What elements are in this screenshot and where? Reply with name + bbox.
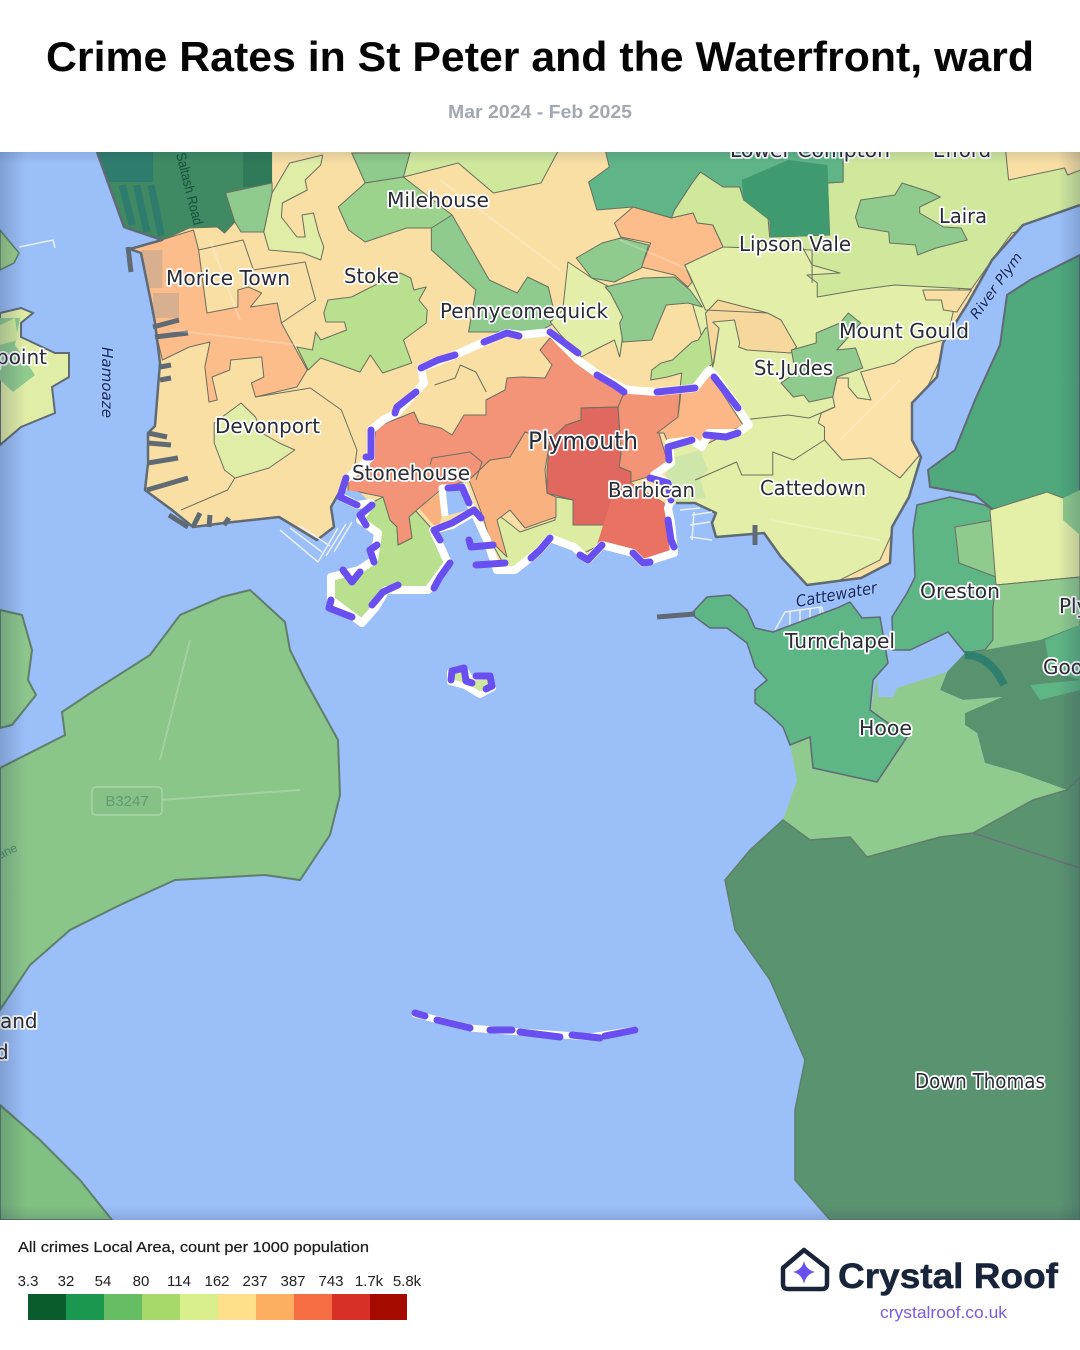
wards: salmon west and centre [348, 338, 624, 545]
place label: Laira: Laira [939, 204, 987, 228]
marinas [280, 508, 825, 632]
ward boundary: Drake's Island [450, 668, 493, 695]
place label: Mount Gould: Mount Gould [839, 319, 969, 343]
wards: orange sliver [420, 493, 442, 526]
place label: Down Thomas: Down Thomas [915, 1069, 1045, 1093]
legend colour scale [28, 1294, 407, 1320]
legend tick labels: 237 [242, 1273, 268, 1290]
legend title: All crimes Local Area, count per 1000 population [18, 1239, 369, 1256]
wards: pale green south of centre [494, 496, 603, 566]
land: Mount Edgcumbe islet and pier [0, 230, 55, 270]
legend tick labels: 743 [318, 1273, 344, 1290]
legend tick labels: 387 [280, 1273, 306, 1290]
brand url: crystalroof.co.uk [880, 1304, 1008, 1322]
wards: pale green park patch [664, 450, 708, 503]
place label: Efford (cropped at top): Efford [933, 138, 991, 162]
sea [0, 152, 1080, 1220]
place label: Cattedown: Cattedown [760, 476, 866, 500]
dockyard piers [128, 247, 755, 545]
land: western peninsula [0, 590, 340, 1010]
wards: salmon east [618, 393, 680, 482]
legend tick labels: 54 [95, 1273, 111, 1290]
place label: Morice Town: Morice Town [166, 266, 290, 290]
land: Goodwin green patch [1030, 625, 1080, 700]
icon: house with star [783, 1250, 827, 1289]
road badge: B3247 [92, 787, 162, 815]
land: Plymstock pale [990, 492, 1080, 585]
wards: south peninsula (ward) [335, 497, 444, 618]
place label: Lipson Vale: Lipson Vale [739, 232, 851, 256]
place label: Pennycomequick: Pennycomequick [440, 299, 608, 323]
wards: eastern pale green [668, 240, 960, 600]
subtitle: date range: Mar 2024 - Feb 2025 [448, 102, 632, 122]
ward boundary: purple dashes [329, 332, 738, 617]
ward boundary: Breakwater [415, 1013, 635, 1038]
land: south-east dark [940, 625, 1080, 790]
place label: Oreston: Oreston [920, 579, 1000, 603]
legend tick labels: 5.8k [393, 1273, 422, 1290]
land: Hooe light green [783, 672, 1067, 857]
pier at Mount Batten [657, 614, 695, 617]
place label: Plymouth: Plymouth [528, 427, 638, 455]
land: city base with Plymouth wards [90, 150, 1080, 632]
map vignette edges [0, 152, 1080, 1220]
wards: orange centre [469, 432, 556, 557]
wards: north-west group [93, 150, 559, 510]
road badge: B3247: B3247 [105, 793, 149, 810]
land: Turnchapel green [693, 595, 907, 782]
logo: Crystal Roof [783, 1250, 1058, 1322]
wards: orange north-east [657, 372, 743, 445]
place label: Turnchapel: Turnchapel [784, 629, 895, 653]
ward boundary: Millbay white loop [442, 487, 474, 516]
land: Oreston mid green [954, 520, 995, 577]
legend tick labels: 3.3 [18, 1273, 38, 1290]
land: Plym mid [984, 576, 1080, 650]
road boundary line [973, 833, 1080, 868]
land: Torpoint [0, 308, 69, 445]
legend tick labels: 32 [58, 1273, 74, 1290]
teal channel [965, 655, 1004, 685]
eastern coastline [676, 205, 1080, 585]
water label: Cattewater: Cattewater [794, 578, 880, 611]
legend tick labels [18, 1273, 422, 1290]
faint street lines [159, 180, 900, 801]
land: Oreston [891, 496, 996, 654]
land: Plymstock mid green [1063, 490, 1080, 535]
title: Crime Rates in St Peter and the Waterfront, ward [46, 33, 1034, 80]
land: south-west corner [0, 1105, 112, 1220]
Millbay inner water [443, 490, 468, 516]
ward boundary: white outline [331, 332, 749, 623]
place label: cropped and: and [0, 1009, 38, 1033]
legend tick labels: 1.7k [355, 1273, 384, 1290]
brand name: Crystal Roof [838, 1257, 1058, 1296]
legend [18, 1239, 422, 1320]
place label: Hooe: Hooe [859, 716, 912, 740]
land: Down Thomas dark green [725, 777, 1080, 1220]
land: Plym east bank [928, 255, 1080, 520]
wards: high-crime red centre [546, 406, 665, 526]
place label: St.Judes: St.Judes [754, 356, 833, 380]
wards: internal salmon boundaries [430, 452, 482, 480]
city coastline [97, 152, 348, 540]
land: small west shore [0, 610, 36, 728]
legend tick labels: 80 [133, 1273, 149, 1290]
place label: Stonehouse: Stonehouse [352, 461, 470, 485]
wards: north-east group [550, 150, 1080, 480]
place label: Stoke: Stoke [344, 264, 399, 288]
water label: River Plym: River Plym [967, 250, 1026, 322]
legend tick labels: 114 [167, 1273, 191, 1290]
legend tick labels: 162 [204, 1273, 230, 1290]
place label: Lower Compton (cropped at top): Lower Compton [730, 138, 890, 162]
place label: Barbican: Barbican [608, 478, 695, 502]
road label: Saltash Road: Saltash Road [173, 151, 207, 227]
place label: Devonport: Devonport [215, 414, 320, 438]
water label: Hamoaze: Hamoaze [98, 347, 116, 418]
place label: Milehouse: Milehouse [387, 188, 489, 212]
